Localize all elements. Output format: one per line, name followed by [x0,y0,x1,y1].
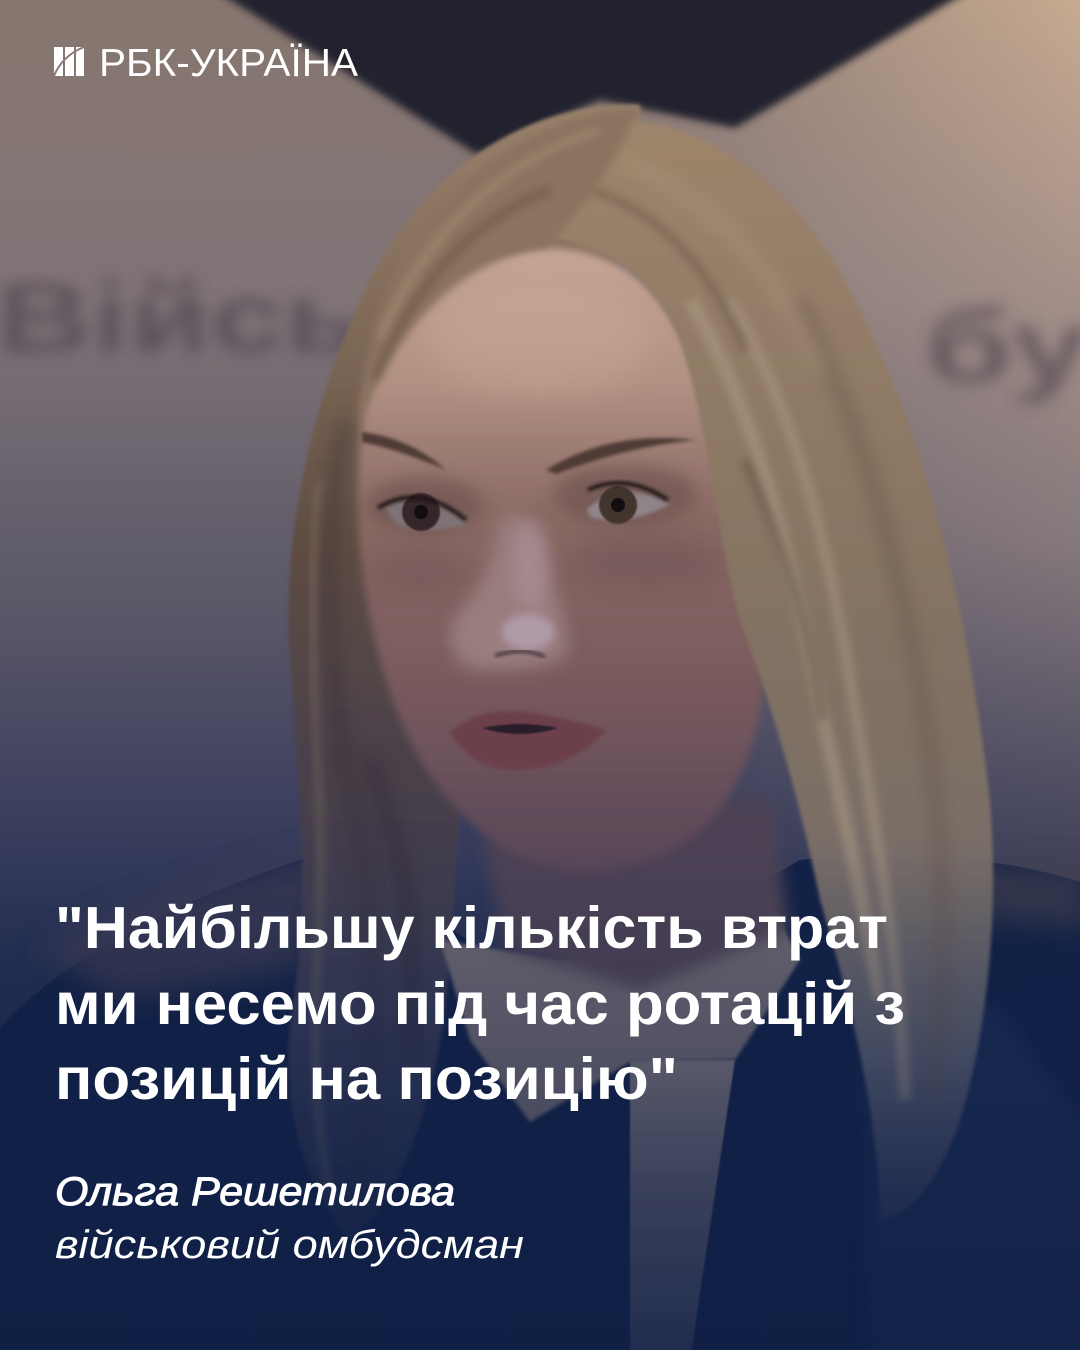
quote headline [55,895,905,1112]
blurred wall lettering right: бу [925,289,1080,405]
right eyebrow [546,438,696,474]
quote line 1: "Найбільшу кількість втрат [55,895,888,961]
blurred wall lettering left: Війсь [0,262,366,374]
left hair strands [312,130,600,1190]
cheek shadow right [580,536,713,582]
nose [451,515,567,669]
logo wordmark: РБК-УКРАЇНА [99,42,358,85]
bottom navy overlay [0,850,1080,1350]
jacket [0,850,1080,1350]
left eyebrow [362,432,446,470]
quote line 2: ми несемо під час ротацій з [55,971,905,1037]
eye socket shade right [553,465,697,525]
forehead highlight [460,340,620,384]
eye socket shade left [367,477,483,533]
dark ceiling chevron [215,0,970,155]
hair back left [288,105,640,1240]
blouse and collar [440,900,800,1350]
lips [450,711,606,770]
cheek shadow left [392,556,448,582]
quote line 3: позицій на позицію" [55,1046,678,1112]
right eye [586,483,670,524]
speaker name: Ольга Решетилова [55,1170,455,1214]
logo [54,42,358,85]
hair parting top [312,108,640,1190]
photo background wall [0,0,1080,1028]
left eye [378,493,468,531]
logo mark [54,47,84,76]
hair strands [590,160,943,1100]
face and neck [358,248,790,990]
speaker attribution [55,1170,524,1267]
speaker role: військовий омбудсман [55,1223,524,1267]
hair right side [500,120,993,1222]
